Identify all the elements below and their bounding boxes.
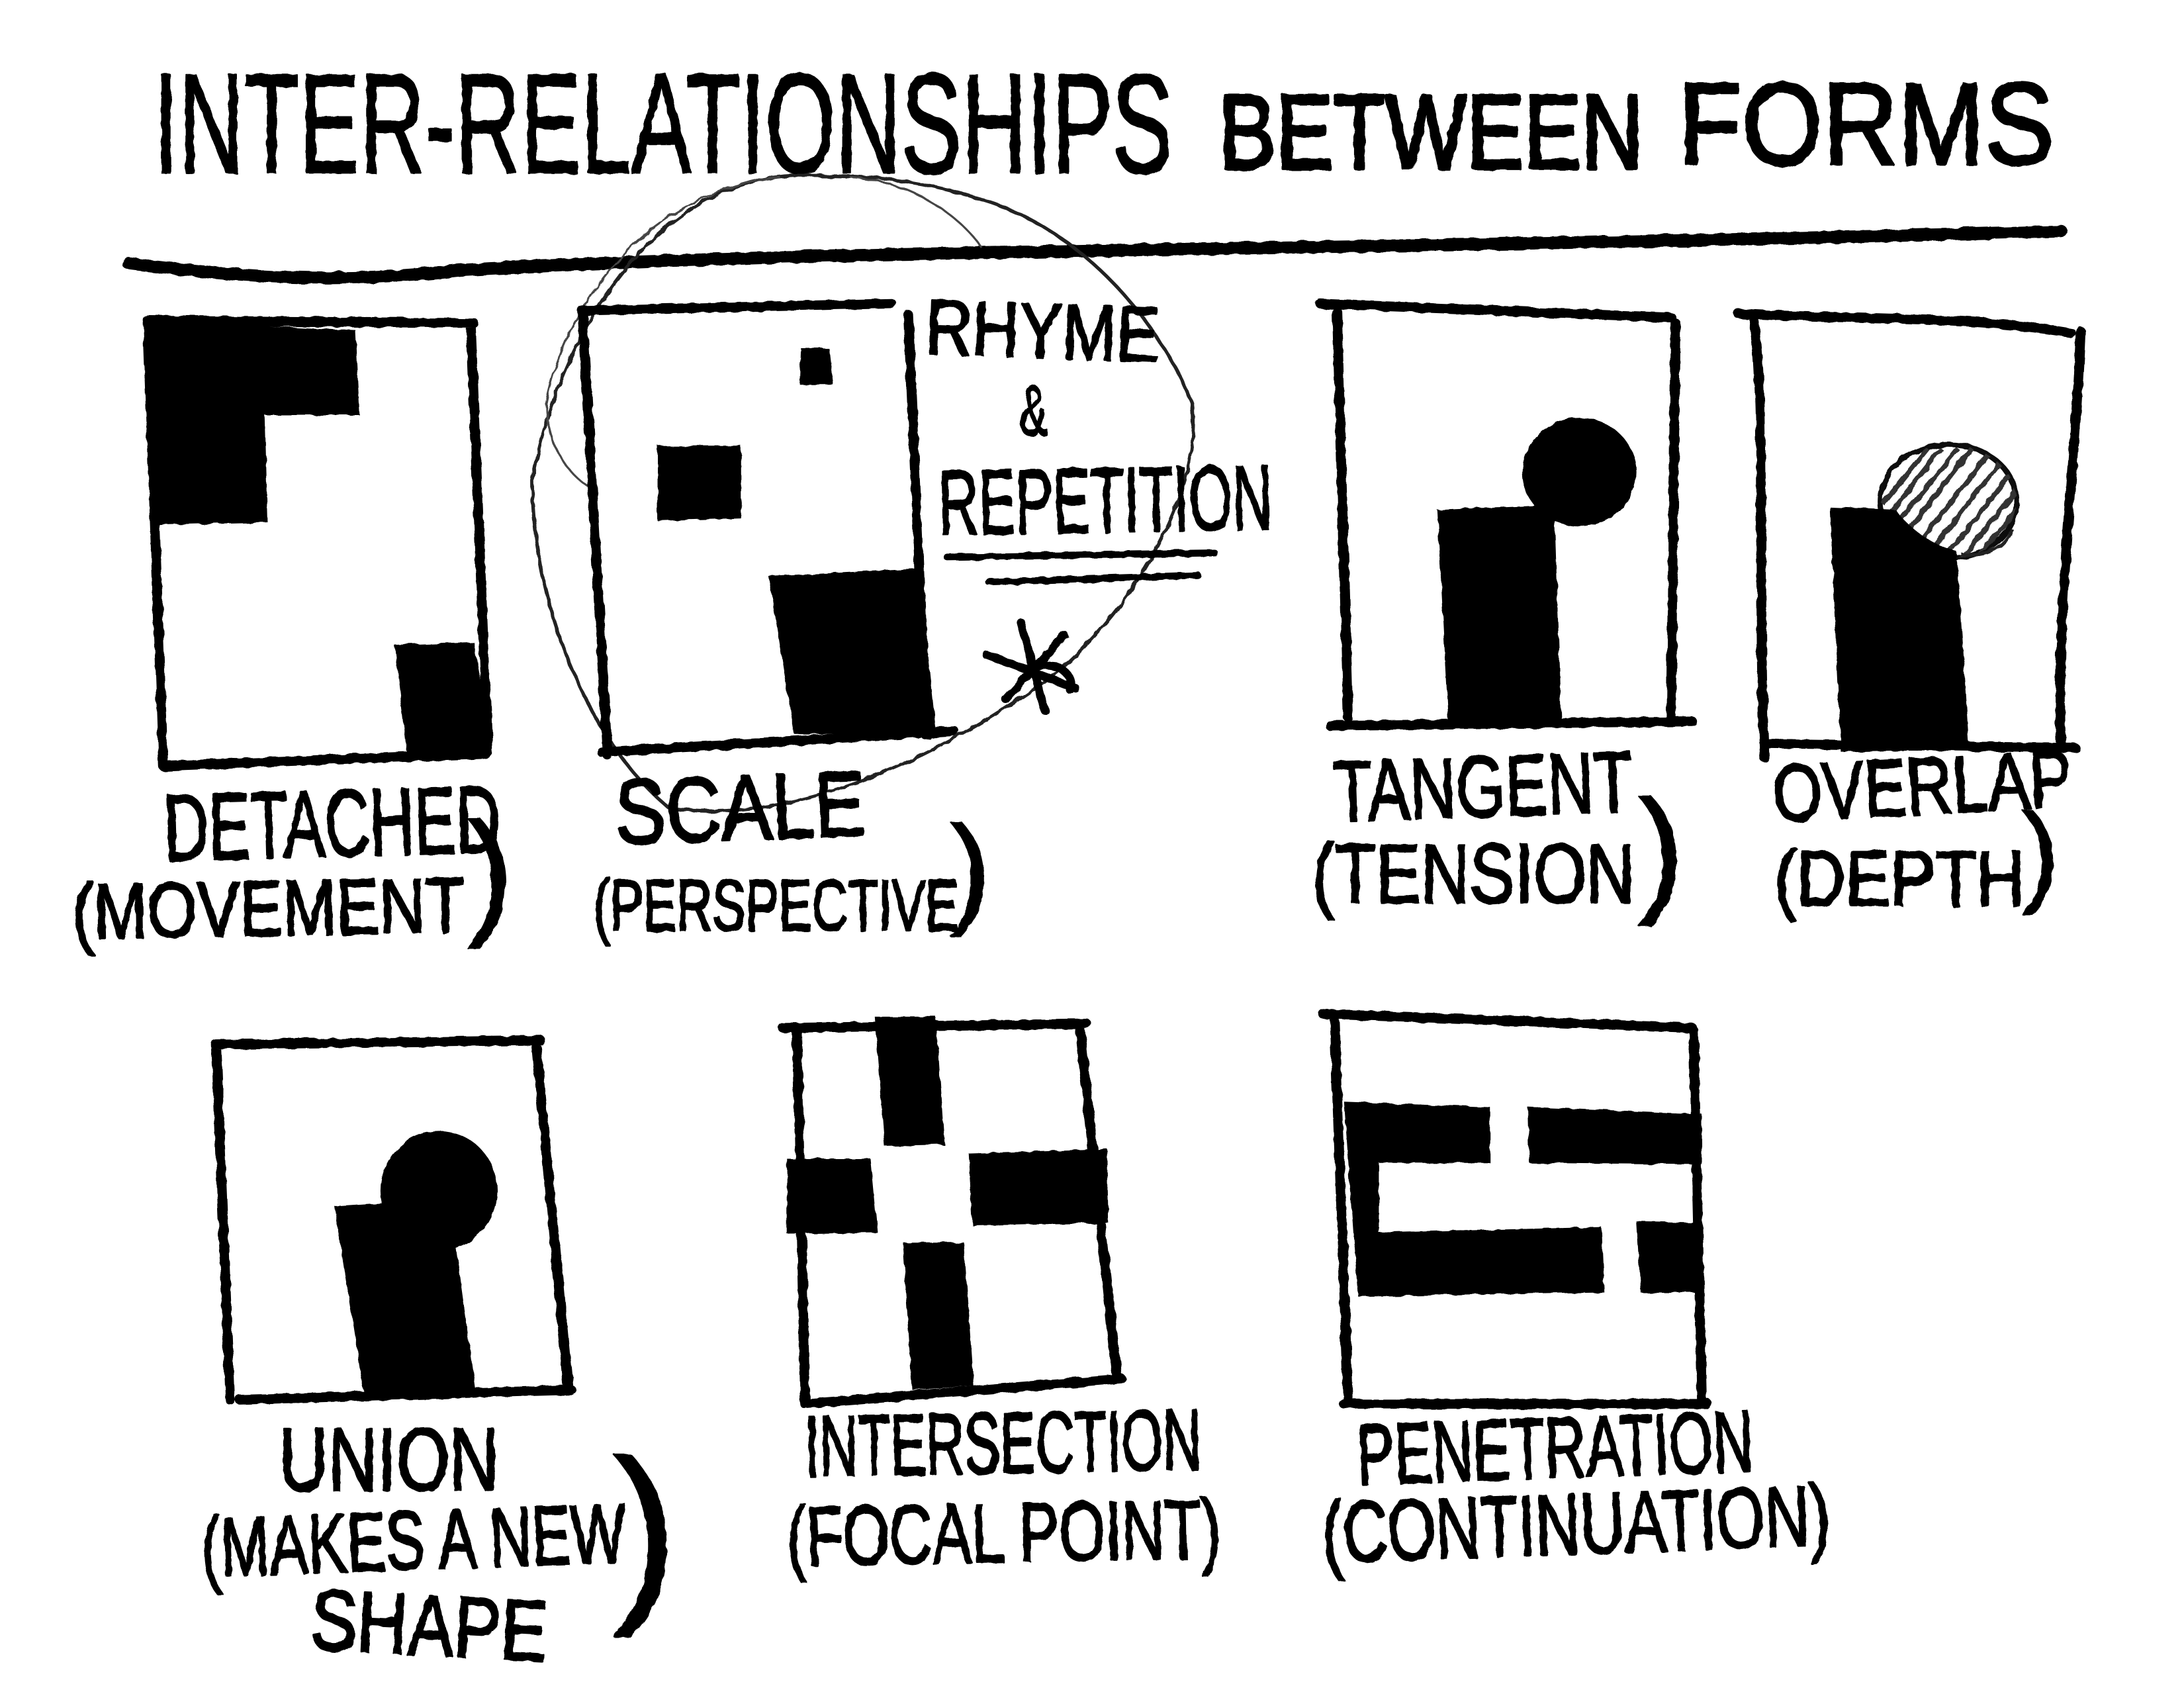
forms: overlap [1830,507,1969,752]
caption: makes a new shape: (MAKES A NEW [200,1486,627,1595]
caption: makes a new shape: SHAPE [308,1571,550,1680]
header rule [128,231,2061,278]
frame: intersection [783,1023,1121,1404]
caption: depth: (DEPTH [1774,835,2025,922]
frame: penetration [1323,1014,1707,1404]
caption: movement: (MOVEMENT [71,861,466,955]
panel: overlap [1738,313,2081,839]
forms: union [334,1201,477,1401]
caption: movement: ) [467,794,513,949]
caption: depth: ) [2022,791,2059,915]
title: BETWEEN [1218,73,1643,191]
label: overlap: OVERLAP [1770,733,2074,839]
caption: tension: (TENSION [1312,827,1635,920]
panel: tangent [1320,304,1692,840]
frame: overlap [1738,313,2081,758]
label: union: UNION [279,1409,499,1509]
label: scale: SCALE [613,753,867,864]
caption: makes a new shape [200,1420,678,1680]
frame: detached [148,320,488,766]
label: detached: DETACHED [162,767,502,881]
icon: asterisk [986,622,1075,710]
caption: perspective: (PERSPECTIVE [594,865,958,946]
note underlines [947,553,1214,582]
label: tangent: TANGENT [1332,733,1634,840]
caption: focal point: (FOCAL POINT) [786,1482,1222,1583]
forms: scale [658,348,936,734]
rhyme and repetition circle [532,175,1193,811]
caption: depth [1774,791,2059,922]
panel: union [216,1041,571,1509]
caption: continuation: (CONTINUATION) [1320,1467,1832,1581]
forms: detached [146,320,492,753]
caption: tension: ) [1638,771,1684,927]
panel: scale [582,304,954,864]
title: INTER-RELATIONSHIPS [154,45,1173,203]
note heading: repetition: REPETITION [937,446,1273,555]
hatched circle [1880,444,2022,560]
frame: tangent [1320,304,1692,726]
caption: movement [71,794,513,955]
frame: scale [582,304,954,755]
forms: penetration [1344,1102,1702,1297]
caption: perspective [594,800,991,946]
panel: penetration [1323,1014,1755,1503]
note heading: rhyme: RHYME [925,283,1161,379]
label: intersection: INTERSECTION [804,1391,1203,1495]
panel: detached [146,320,502,881]
ampersand: & [1020,372,1048,449]
frame: union [216,1041,571,1399]
caption: perspective: ) [950,800,991,937]
note: rhyme and repetition [925,283,1273,710]
label: penetration: PENETRATION [1355,1393,1755,1503]
title: FORMS [1678,59,2054,189]
caption: makes a new shape: ) [613,1420,678,1639]
forms: tangent [1437,504,1561,723]
panel: intersection [783,1017,1203,1495]
caption: tension [1312,771,1684,927]
forms: intersection [787,1017,1109,1390]
